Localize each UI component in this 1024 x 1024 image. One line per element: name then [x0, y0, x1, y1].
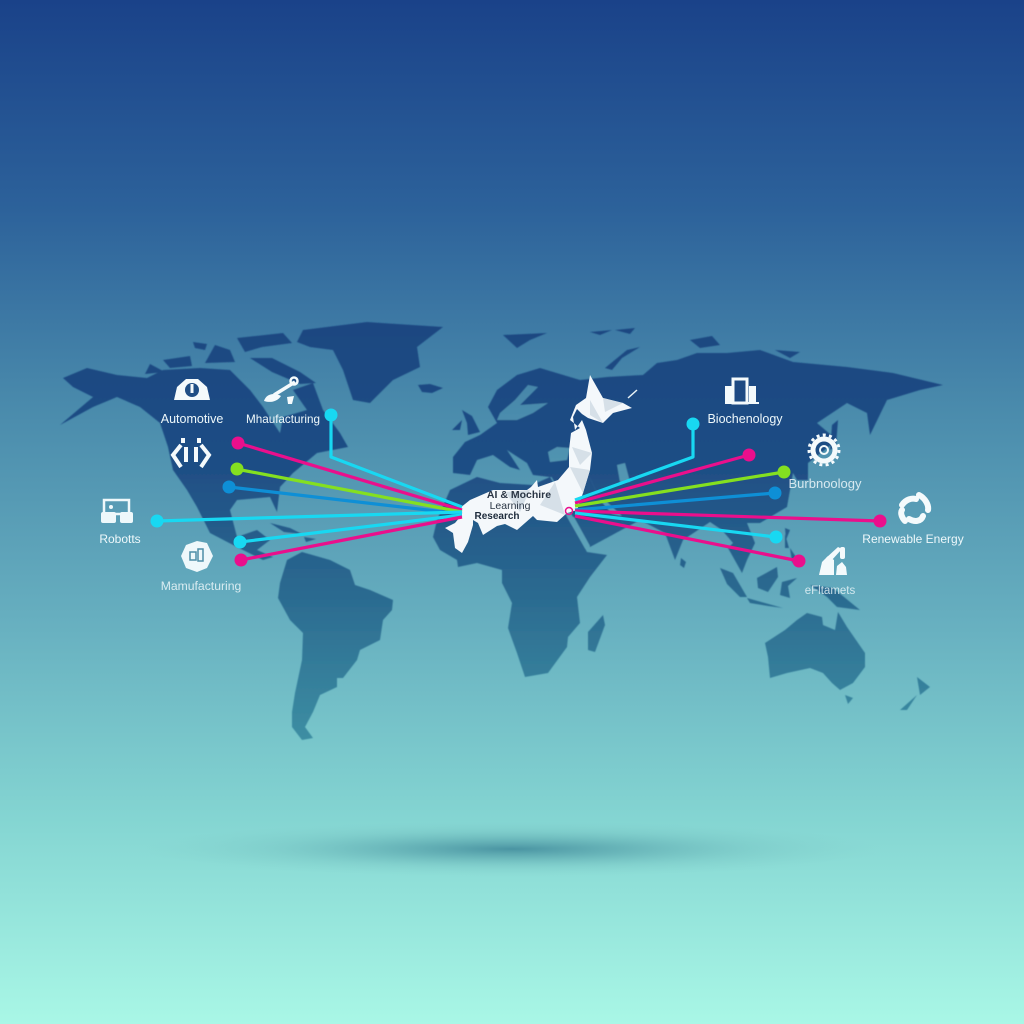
line: elbow cyan west — [331, 415, 462, 507]
Japan main shape — [445, 375, 632, 553]
Baltic sea — [497, 385, 548, 420]
line: elbow cyan east — [575, 424, 693, 500]
center label: AI & Mochire — [487, 489, 551, 501]
Kuril islands — [628, 390, 637, 398]
line: pink northwest — [238, 443, 462, 510]
line: blue east — [575, 493, 775, 510]
Tasmania — [845, 695, 853, 704]
icon: biotech flasks — [725, 379, 759, 404]
Arctic Russia islands — [503, 328, 800, 370]
label: Robots: Robotts — [99, 532, 141, 546]
icon: turbine — [901, 495, 928, 521]
New Guinea — [810, 585, 860, 610]
icon: industrial robot — [819, 547, 847, 575]
line: cyan far west — [157, 512, 462, 521]
line: cyan southwest — [240, 515, 462, 542]
line: green west — [236, 469, 462, 512]
Arctic islands — [145, 333, 316, 384]
icon: gear — [809, 435, 839, 465]
Japan node marker — [566, 508, 572, 514]
line: blue west — [229, 487, 462, 514]
icon: manufacturing swirl — [181, 541, 213, 572]
icon: robots — [101, 500, 133, 523]
Sumatra — [720, 568, 747, 597]
line: pink far east — [575, 511, 880, 521]
center label — [474, 489, 551, 522]
Australia — [765, 612, 865, 690]
label: Burbnoology: Burbnoology — [788, 476, 862, 491]
Greenland — [297, 322, 443, 403]
label: Biochenology: Biochenology — [707, 412, 783, 426]
label: Automotive: Automotive — [161, 412, 223, 426]
icon: brackets and figures — [173, 438, 209, 467]
Britain and Ireland — [452, 410, 480, 435]
label: Pharmaceuticals-like: eFltamets — [805, 585, 855, 597]
line: pink northeast — [575, 455, 749, 503]
Sakhalin and Sri Lanka — [680, 420, 838, 568]
Iceland — [418, 384, 443, 393]
South America — [278, 552, 393, 740]
icon: robot arm — [264, 378, 298, 404]
low-poly facets — [505, 398, 623, 515]
center label: Research — [474, 511, 520, 522]
connection lines — [157, 415, 880, 561]
Cuba and Caribbean — [270, 523, 316, 542]
line: cyan southeast — [575, 513, 776, 537]
North America — [60, 368, 348, 560]
Taiwan and Philippines — [785, 528, 798, 567]
label: Manufacturing north: Mhaufacturing — [246, 413, 320, 426]
Japan low-poly map — [445, 375, 637, 553]
Eurasia — [453, 350, 943, 573]
Borneo — [757, 567, 778, 592]
line: pink southwest — [241, 517, 462, 560]
label: Renewable Energy: Renewable Energy — [862, 532, 964, 546]
floor shadow — [142, 821, 882, 877]
label: Manufacturing south: Mamufacturing — [161, 579, 241, 593]
center label: Learning — [490, 500, 531, 512]
Arabia — [548, 470, 627, 547]
line: green east — [575, 472, 784, 506]
line: pink southeast — [575, 516, 799, 561]
Black Sea and Caspian — [548, 447, 630, 482]
Madagascar — [588, 615, 605, 652]
Sulawesi — [780, 578, 797, 598]
Java — [747, 598, 783, 608]
world map — [60, 322, 943, 740]
connection endpoint dots — [150, 408, 886, 568]
New Zealand — [900, 677, 930, 710]
Red Sea and Persian Gulf — [568, 500, 622, 548]
Africa — [433, 477, 607, 677]
icon: automotive gauge — [174, 379, 210, 400]
